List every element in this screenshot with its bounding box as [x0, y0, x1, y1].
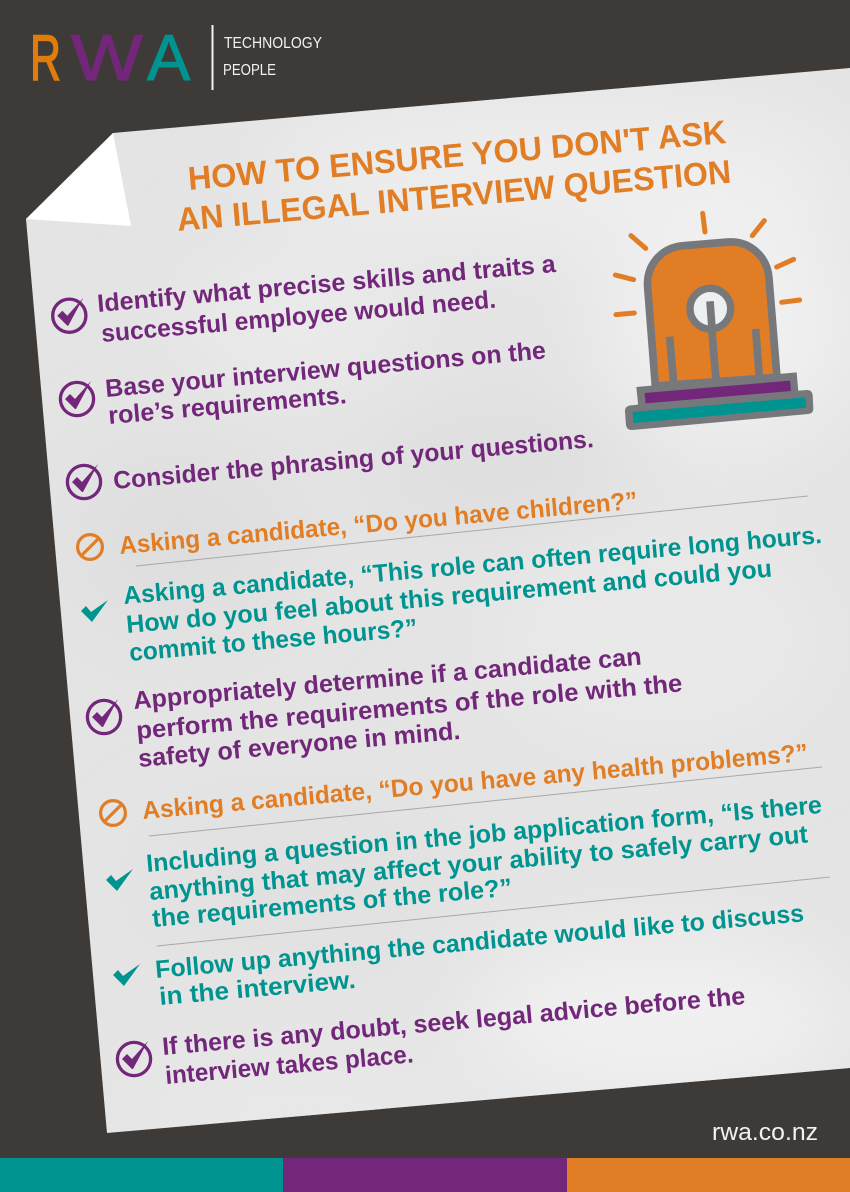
footer colour bars [0, 1158, 850, 1192]
good example: long hours: How do you feel about this requirement and could you [125, 555, 773, 639]
check item: base questions: role’s requirements. [107, 381, 348, 430]
check item: safety [87, 643, 684, 773]
good example: application form: Including a question in the job application form, “Is there [145, 791, 823, 878]
check item: base questions [60, 337, 547, 430]
good example: long hours: commit to these hours?” [128, 614, 418, 667]
good example: follow up: in the interview. [158, 966, 357, 1011]
check item: legal advice [117, 982, 746, 1090]
good example: application form [106, 791, 823, 933]
good example: long hours [81, 521, 823, 667]
check item: identify skills: successful employee would need. [100, 286, 497, 348]
good example: application form: the requirements of the role?” [151, 874, 513, 933]
icon: alarm siren [615, 213, 813, 430]
check item: base questions: Base your interview questions on the [104, 337, 547, 403]
title: AN ILLEGAL INTERVIEW QUESTION [175, 153, 732, 238]
check item: safety: safety of everyone in mind. [137, 717, 461, 773]
check item: safety: perform the requirements of the role with the [135, 669, 684, 745]
good example: follow up: Follow up anything the candidate would like to discuss [154, 899, 805, 984]
check item: safety: Appropriately determine if a candidate can [132, 643, 643, 715]
check item: identify skills: Identify what precise skills and traits a [96, 250, 558, 318]
good example: long hours: Asking a candidate, “This role can often require long hours. [122, 521, 823, 610]
good example: application form: anything that may affect your ability to safely carry out [148, 820, 810, 906]
logo: PEOPLE [223, 62, 276, 79]
logo: TECHNOLOGY [224, 35, 322, 52]
logo [30, 21, 322, 94]
title [175, 113, 732, 238]
website url: rwa.co.nz [712, 1119, 818, 1146]
check item: identify skills [53, 250, 558, 348]
check item: phrasing: Consider the phrasing of your questions. [112, 425, 595, 495]
bad example: health: Asking a candidate, “Do you have any health problems?” [141, 739, 809, 825]
title: HOW TO ENSURE YOU DON'T ASK [186, 113, 728, 197]
logo: R [30, 21, 61, 94]
folded corner [26, 133, 131, 226]
logo: A [147, 21, 191, 94]
check item: legal advice: If there is any doubt, seek legal advice before the [161, 982, 746, 1061]
check item: legal advice: interview takes place. [164, 1040, 415, 1090]
logo: W [71, 21, 143, 94]
bad example: children: Asking a candidate, “Do you have children?” [118, 487, 639, 560]
